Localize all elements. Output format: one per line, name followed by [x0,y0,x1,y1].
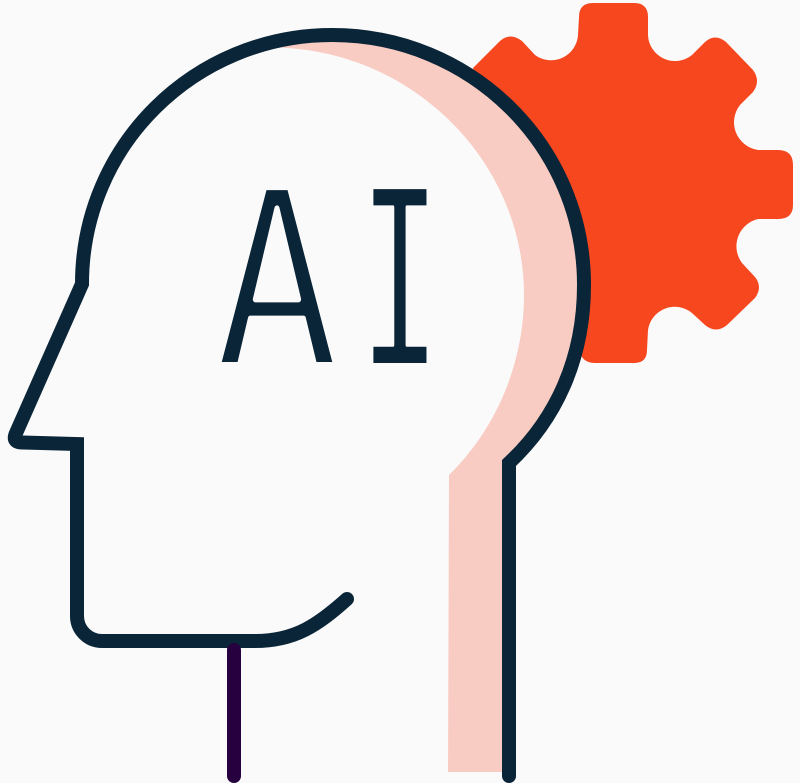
head outline [15,35,584,776]
letter I: I [359,138,441,423]
text: AI [215,138,441,423]
shadow: pink inner head shading [270,36,584,772]
neck line [227,650,241,776]
icon: orange gear [473,3,793,363]
letter A: A [215,140,339,423]
